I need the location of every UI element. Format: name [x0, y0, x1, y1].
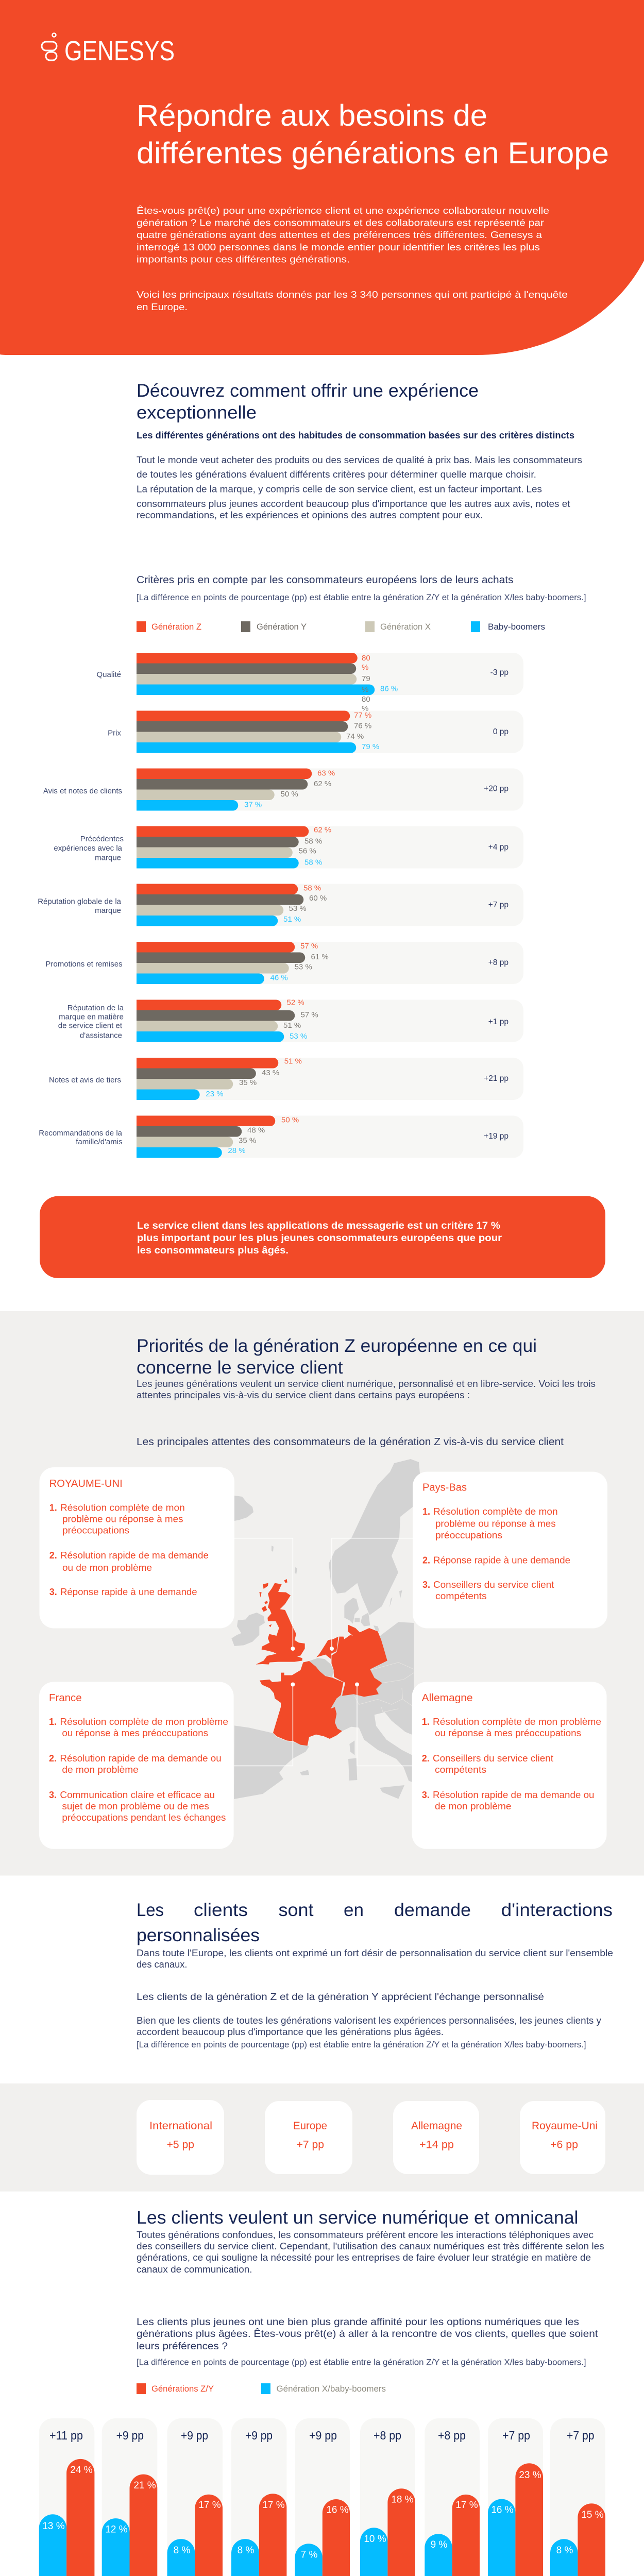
row: Prix: 79 % [362, 742, 379, 751]
body text: des canaux. [137, 1959, 188, 1970]
column: Service client réseaux sociaux: +8 pp [438, 2429, 466, 2442]
map subtitle: Les principales attentes des consommateurs de la génération Z vis-à-vis du service client [137, 1436, 564, 1448]
row: Qualité: -3 pp [490, 668, 509, 677]
body text: Les clients plus jeunes ont une bien plus grande affinité pour les options numériques que les [137, 2317, 579, 2328]
row: Promotions et remises: Promotions et remises [45, 960, 123, 969]
panel: Pays-Bas: Conseillers du service client [433, 1580, 554, 1590]
body text: Tout le monde veut acheter des produits ou des services de qualité à prix bas. Mais les consommateurs [137, 455, 582, 465]
panel: Allemagne: 2. [422, 1753, 430, 1764]
row: Précédentes expériences: marque [95, 853, 121, 862]
row: Avis et notes de clients: +20 pp [484, 784, 509, 793]
column: Service client réseaux sociaux [419, 2418, 480, 2576]
chart legend: Génération Y [257, 622, 307, 632]
column: Message/SMS: 18 % [391, 2495, 414, 2505]
row: Recommandations: 48 % [247, 1126, 265, 1134]
row: Avis et notes de clients: 50 % [280, 790, 298, 799]
logo: Genesys: GENESYS [64, 36, 175, 66]
row: Réputation service client: 53 % [290, 1032, 307, 1041]
column: Message/SMS: 10 % [364, 2534, 386, 2545]
panel: France: Résolution rapide de ma demande ou [60, 1753, 222, 1764]
row: Prix: 0 pp [493, 727, 509, 736]
body text: Dans toute l'Europe, les clients ont exprimé un fort désir de personnalisation du service client sur l'ensemble [137, 1948, 613, 1958]
column: Applications mobiles [167, 2418, 223, 2576]
panel: Pays-Bas: compétents [435, 1591, 487, 1601]
card: Allemagne: +14 pp [419, 2139, 454, 2150]
map: France [260, 1661, 344, 1745]
panel: Allemagne: Conseillers du service client [433, 1753, 553, 1764]
card: Europe [265, 2101, 352, 2174]
heading: interactions personnalisées: d'interactions [501, 1900, 613, 1920]
row: Qualité: 80 [362, 695, 370, 704]
row: Qualité: 86 % [380, 684, 398, 693]
heading: priorités: Priorités de la génération Z européenne en ce qui [137, 1336, 537, 1356]
column: Applications mobiles: 8 % [174, 2545, 190, 2556]
column: Service client réseaux sociaux: 17 % [455, 2500, 478, 2511]
panel: Allemagne: 1. [422, 1717, 430, 1727]
row: Réputation service client: marque en matière [59, 1013, 124, 1022]
panel: Royaume-Uni: 1. [49, 1502, 57, 1513]
heading: interactions personnalisées: Les [137, 1900, 164, 1920]
row: Réputation service client: 52 % [286, 998, 304, 1007]
body text [137, 2230, 604, 2367]
row: Réputation service client: d'assistance [80, 1031, 122, 1040]
panel: Allemagne: Résolution rapide de ma demande ou [433, 1790, 595, 1800]
panel: Royaume-Uni: Résolution rapide de ma demande [60, 1550, 209, 1561]
row: Prix [108, 711, 523, 753]
heading: interactions personnalisées [137, 1900, 613, 1945]
row: Avis et notes de clients: Avis et notes de clients [43, 787, 122, 795]
bar chart: purchase criteria [38, 653, 523, 1158]
row: Précédentes expériences: 58 % [304, 858, 322, 867]
panel: Royaume-Uni: ou de mon problème [62, 1563, 152, 1573]
chart legend [137, 2383, 386, 2394]
row: Qualité: % [362, 685, 368, 694]
intro text [137, 206, 568, 312]
body text: Les clients de la génération Z et de la génération Y apprécient l'échange personnalisé [137, 1992, 544, 2003]
panel: Allemagne: 3. [422, 1790, 430, 1800]
chart heading: [La différence en points de pourcentage (pp) est établie entre la génération Z/Y et la génération X/les baby-boomers.] [137, 593, 586, 602]
body text: générations, ce qui souligne la nécessité pour les entreprises de faire évoluer leur stratégie en matière de [137, 2252, 591, 2263]
chart heading [137, 574, 586, 602]
callout: service client messagerie: Le service client dans les applications de messagerie est un critère 17 % [137, 1221, 500, 1231]
column: Chatbot site Web [550, 2418, 605, 2576]
hero panel [0, 0, 644, 355]
row: Réputation service client: 51 % [283, 1021, 301, 1030]
row: Avis et notes de clients: 63 % [317, 769, 335, 778]
section heading: expérience exceptionnelle: exceptionnelle [137, 403, 257, 422]
column: Chatbot mobile: +9 pp [309, 2429, 337, 2442]
row: Précédentes expériences: 58 % [304, 837, 322, 846]
row: Avis et notes de clients [43, 769, 523, 811]
heading: priorités [137, 1336, 537, 1378]
panel: Royaume-Uni: Résolution complète de mon [60, 1502, 185, 1513]
body text [137, 1948, 613, 2049]
panel: France: Résolution complète de mon problème [60, 1717, 228, 1727]
row: Prix: Prix [108, 729, 121, 738]
connector lines [234, 1538, 413, 1766]
chart legend [137, 621, 545, 632]
panel: France: 1. [49, 1717, 57, 1727]
panel: Royaume-Uni: ROYAUME-UNI [49, 1478, 123, 1489]
column: Applications mobiles: +9 pp [181, 2429, 208, 2442]
row: Notes et avis de tiers: Notes et avis de tiers [49, 1076, 121, 1084]
column: Chatbot site Web: 8 % [556, 2545, 573, 2556]
row: Qualité: Qualité [96, 670, 121, 679]
body text [137, 1379, 596, 1400]
panel: France: préoccupations pendant les échanges [62, 1812, 226, 1823]
logo: Genesys [42, 33, 175, 66]
map: Espagne [234, 1725, 309, 1799]
column: Applications de messagerie: 12 % [105, 2524, 128, 2535]
map of Europe [231, 1459, 420, 1799]
panel: Royaume-Uni: préoccupations [62, 1525, 129, 1535]
body text: attentes principales vis-à-vis du service client dans certains pays européens : [137, 1390, 470, 1400]
body text: consommateurs plus jeunes accordent beaucoup plus d'importance que les autres aux avis, notes et [137, 499, 570, 509]
column: Chatbot mobile: 7 % [301, 2549, 317, 2561]
panel: France: Communication claire et efficace au [60, 1790, 215, 1800]
title [137, 99, 609, 170]
band: personalisation by region [0, 2083, 644, 2192]
panel: Pays-Bas [413, 1472, 607, 1628]
chart legend: Génération Z [151, 622, 201, 632]
card: International [137, 2100, 224, 2175]
row: Promotions et remises: 46 % [270, 973, 288, 982]
body text: de toutes les générations évaluent différents critères pour déterminer quelle marque choisir. [137, 469, 536, 480]
panel: Royaume-Uni: 3. [49, 1587, 57, 1597]
row: Réputation service client: +1 pp [488, 1018, 509, 1026]
column: Conseiller en direct [488, 2418, 543, 2576]
row: Réputation service client [58, 998, 523, 1042]
row: Qualité: % [362, 704, 368, 713]
map: Belgique [309, 1658, 333, 1677]
column: Chat vidéo: +11 pp [49, 2429, 83, 2442]
body text: [La différence en points de pourcentage (pp) est établie entre la génération Z/Y et la génération X/les baby-boomers.] [137, 2358, 586, 2367]
row: Réputation globale [38, 884, 523, 926]
intro text: en Europe. [137, 302, 188, 312]
row: Réputation globale: Réputation globale de la [38, 897, 122, 906]
row: Précédentes expériences: 62 % [314, 825, 331, 835]
callout: service client messagerie [40, 1196, 605, 1278]
map: Europe continentale [331, 1622, 414, 1783]
body text: recommandations, et les expériences et opinions des autres comptent pour eux. [137, 510, 483, 520]
map: Royaume-Uni [256, 1579, 305, 1665]
map: Pays-Bas [316, 1637, 338, 1659]
body text: Les jeunes générations veulent un service client numérique, personnalisé et en libre-service. Voici les trois [137, 1379, 596, 1389]
panel: Pays-Bas: Pays-Bas [422, 1482, 467, 1493]
column: Chatbot mobile: 16 % [326, 2505, 349, 2515]
panel: Royaume-Uni: Réponse rapide à une demande [60, 1587, 197, 1597]
row: Promotions et remises: 53 % [295, 963, 312, 972]
card: Europe: +7 pp [297, 2139, 324, 2150]
panel: Allemagne: de mon problème [435, 1801, 511, 1811]
column: Chat vidéo: 24 % [70, 2465, 93, 2476]
row: Réputation globale: 60 % [309, 894, 327, 903]
body text: canaux de communication. [137, 2264, 252, 2275]
row: Recommandations: famille/d'amis [76, 1138, 123, 1146]
body text: [La différence en points de pourcentage (pp) est établie entre la génération Z/Y et la génération X/les baby-boomers.] [137, 2040, 586, 2049]
row: Réputation globale: 53 % [289, 904, 307, 913]
intro text: génération ? Le marché des consommateurs et des collaborateurs est représenté par [137, 218, 544, 228]
panel: France: 2. [49, 1753, 57, 1764]
chart heading: Critères pris en compte par les consommateurs européens lors de leurs achats [137, 574, 513, 586]
row: Notes et avis de tiers: 35 % [239, 1078, 257, 1087]
column chart: digital channels [39, 2418, 605, 2576]
panel: Pays-Bas: 3. [422, 1580, 430, 1590]
callout: service client messagerie: les consommateurs plus âgés. [137, 1245, 289, 1256]
column: Haut-parleur intelligent [231, 2418, 286, 2576]
column: Chat vidéo [39, 2418, 94, 2576]
panel: Allemagne: ou réponse à mes préoccupations [435, 1728, 581, 1738]
row: Notes et avis de tiers: 51 % [284, 1057, 302, 1065]
body text: Toutes générations confondues, les consommateurs préfèrent encore les interactions téléphoniques avec [137, 2230, 594, 2240]
intro text: quatre générations ayant des attentes et des préférences très différentes. Genesys a [137, 230, 543, 240]
panel: France: sujet de mon problème ou de mes [62, 1801, 209, 1811]
heading: interactions personnalisées: clients [194, 1900, 248, 1920]
card: Royaume-Uni [520, 2101, 605, 2174]
column: Applications de messagerie [102, 2418, 157, 2576]
column: Chat vidéo: 13 % [42, 2521, 65, 2532]
column: Chatbot site Web: 15 % [581, 2510, 604, 2520]
body text: leurs préférences ? [137, 2341, 228, 2352]
panel: France [39, 1682, 234, 1849]
intro text: Êtes-vous prêt(e) pour une expérience client et une expérience collaborateur nouvelle [137, 206, 549, 216]
panel: Pays-Bas: Réponse rapide à une demande [433, 1555, 570, 1565]
row: Prix: 76 % [354, 722, 371, 731]
row: Prix: 77 % [354, 711, 371, 720]
column: Applications mobiles: 17 % [198, 2500, 221, 2511]
column: Message/SMS: +8 pp [374, 2429, 401, 2442]
column: Service client réseaux sociaux: 9 % [431, 2539, 447, 2550]
panel: Royaume-Uni: 2. [49, 1550, 57, 1561]
heading: priorités: concerne le service client [137, 1358, 343, 1378]
heading: interactions personnalisées: demande [394, 1900, 471, 1920]
body text: Bien que les clients de toutes les générations valorisent les expériences personnalisées, les jeunes clients y [137, 2015, 601, 2026]
row: Qualité: % [362, 663, 368, 672]
panel: Pays-Bas: problème ou réponse à mes [435, 1519, 556, 1529]
card: International: International [149, 2120, 212, 2132]
row: Prix: 74 % [346, 732, 364, 741]
map: Danemark [344, 1598, 359, 1624]
body text: des conseillers du service client. Cependant, l'utilisation des canaux numériques est très différente selon les [137, 2241, 604, 2251]
panel: Pays-Bas: Résolution complète de mon [433, 1506, 558, 1517]
panel: Pays-Bas: 2. [422, 1555, 430, 1565]
row: Précédentes expériences: Précédentes [80, 835, 124, 843]
panel: priorités génération Z [0, 1311, 644, 1875]
column: Chatbot site Web: +7 pp [567, 2429, 595, 2442]
row: Avis et notes de clients: 62 % [314, 779, 331, 788]
row: Recommandations: +19 pp [484, 1132, 509, 1141]
panel: Royaume-Uni: problème ou réponse à mes [62, 1514, 183, 1524]
body text: La réputation de la marque, y compris celle de son service client, est un facteur important. Les [137, 484, 542, 495]
panel: Allemagne: compétents [435, 1765, 486, 1775]
row: Réputation service client: de service client et [58, 1022, 123, 1030]
column: Conseiller en direct: 23 % [519, 2470, 541, 2481]
heading: interactions personnalisées: personnalisées [137, 1925, 260, 1945]
column: Haut-parleur intelligent: 17 % [262, 2500, 285, 2511]
panel: Allemagne: Résolution complète de mon problème [433, 1717, 601, 1727]
row: Précédentes expériences: +4 pp [488, 843, 509, 852]
body text: accordent beaucoup plus d'importance que les générations plus âgées. [137, 2027, 444, 2037]
card: Royaume-Uni: Royaume-Uni [532, 2120, 598, 2132]
row: Recommandations: 50 % [281, 1116, 299, 1124]
row: Recommandations: 35 % [239, 1137, 256, 1145]
panel: France: ou réponse à mes préoccupations [62, 1728, 208, 1738]
row: Précédentes expériences: 56 % [299, 847, 316, 856]
row: Promotions et remises [45, 942, 523, 984]
section heading: expérience exceptionnelle: Découvrez comment offrir une expérience [137, 381, 479, 401]
row: Notes et avis de tiers: +21 pp [484, 1074, 509, 1083]
row: Notes et avis de tiers: 43 % [262, 1069, 279, 1077]
row: Recommandations: Recommandations de la [39, 1129, 123, 1138]
section heading: expérience exceptionnelle: Les différentes générations ont des habitudes de consommation basées sur des critères distincts [137, 430, 574, 440]
row: Réputation globale: 58 % [303, 884, 321, 893]
row: Précédentes expériences [54, 825, 523, 869]
column: Message/SMS [360, 2418, 415, 2576]
column: Applications de messagerie: 21 % [133, 2480, 156, 2491]
row: Promotions et remises: 61 % [311, 953, 329, 961]
chart legend: Génération X [380, 622, 431, 632]
panel: France: de mon problème [62, 1765, 139, 1775]
chart legend: Générations Z/Y [151, 2384, 214, 2394]
panel: Royaume-Uni [39, 1467, 234, 1628]
row: Réputation globale: marque [95, 906, 121, 915]
intro text: importants pour ces différentes générations. [137, 255, 350, 265]
body text [137, 455, 582, 520]
column: Conseiller en direct: 16 % [491, 2505, 514, 2515]
section heading: expérience exceptionnelle [137, 381, 574, 440]
card: Royaume-Uni: +6 pp [550, 2139, 578, 2150]
row: Réputation service client: 57 % [301, 1011, 318, 1019]
title: Répondre aux besoins de [137, 99, 487, 132]
intro text: interrogé 13 000 personnes dans le monde entier pour identifier les critères les plus [137, 242, 540, 252]
row: Recommandations: 28 % [228, 1146, 246, 1155]
map: Allemagne [331, 1624, 387, 1697]
panel: Allemagne [412, 1682, 607, 1849]
panel: France: 3. [49, 1790, 57, 1800]
title: différentes générations en Europe [137, 137, 609, 170]
row: Qualité: 79 [362, 674, 370, 683]
panel: Pays-Bas: 1. [422, 1506, 430, 1517]
card: Allemagne: Allemagne [411, 2120, 462, 2132]
column: Conseiller en direct: +7 pp [502, 2429, 530, 2442]
heading: interactions personnalisées: en [344, 1900, 364, 1920]
chart legend: Baby-boomers [488, 622, 545, 632]
column: Haut-parleur intelligent: 8 % [238, 2545, 254, 2556]
row: Qualité: 80 [362, 654, 370, 663]
map: Irlande [231, 1613, 265, 1646]
map: Corse et Sardaigne [349, 1740, 354, 1755]
row: Promotions et remises: +8 pp [488, 958, 509, 967]
row: Notes et avis de tiers [49, 1057, 523, 1100]
heading: interactions personnalisées: sont [278, 1900, 314, 1920]
heading: numérique et omnicanal: Les clients veulent un service numérique et omnicanal [137, 2208, 578, 2228]
row: Précédentes expériences: expériences avec la [54, 844, 123, 853]
row: Promotions et remises: 57 % [300, 942, 318, 951]
body text: générations plus âgées. Êtes-vous prêt(e) à aller à la rencontre de vos clients, quelles que soient [137, 2328, 598, 2340]
panel: Pays-Bas: préoccupations [435, 1530, 502, 1540]
row: Recommandations [39, 1116, 523, 1158]
panel: Allemagne: Allemagne [422, 1692, 473, 1704]
row: Réputation globale: +7 pp [488, 901, 509, 909]
row: Réputation globale: 51 % [283, 915, 301, 924]
row: Réputation service client: Réputation de la [67, 1004, 124, 1012]
chart legend: Génération X/baby-boomers [276, 2384, 386, 2394]
card: Europe: Europe [293, 2120, 327, 2132]
card: Allemagne [393, 2101, 479, 2174]
row: Avis et notes de clients: 37 % [244, 801, 262, 809]
card: International: +5 pp [167, 2139, 194, 2150]
callout: service client messagerie: plus important pour les plus jeunes consommateurs européens que pour [137, 1233, 502, 1244]
column: Haut-parleur intelligent: +9 pp [245, 2429, 273, 2442]
row: Qualité [96, 653, 523, 713]
row: Notes et avis de tiers: 23 % [206, 1090, 224, 1098]
panel: France: France [49, 1692, 82, 1704]
intro text: Voici les principaux résultats donnés par les 3 340 personnes qui ont participé à l'enquête [137, 290, 568, 300]
column: Chatbot mobile [295, 2418, 350, 2576]
column: Applications de messagerie: +9 pp [116, 2429, 144, 2442]
